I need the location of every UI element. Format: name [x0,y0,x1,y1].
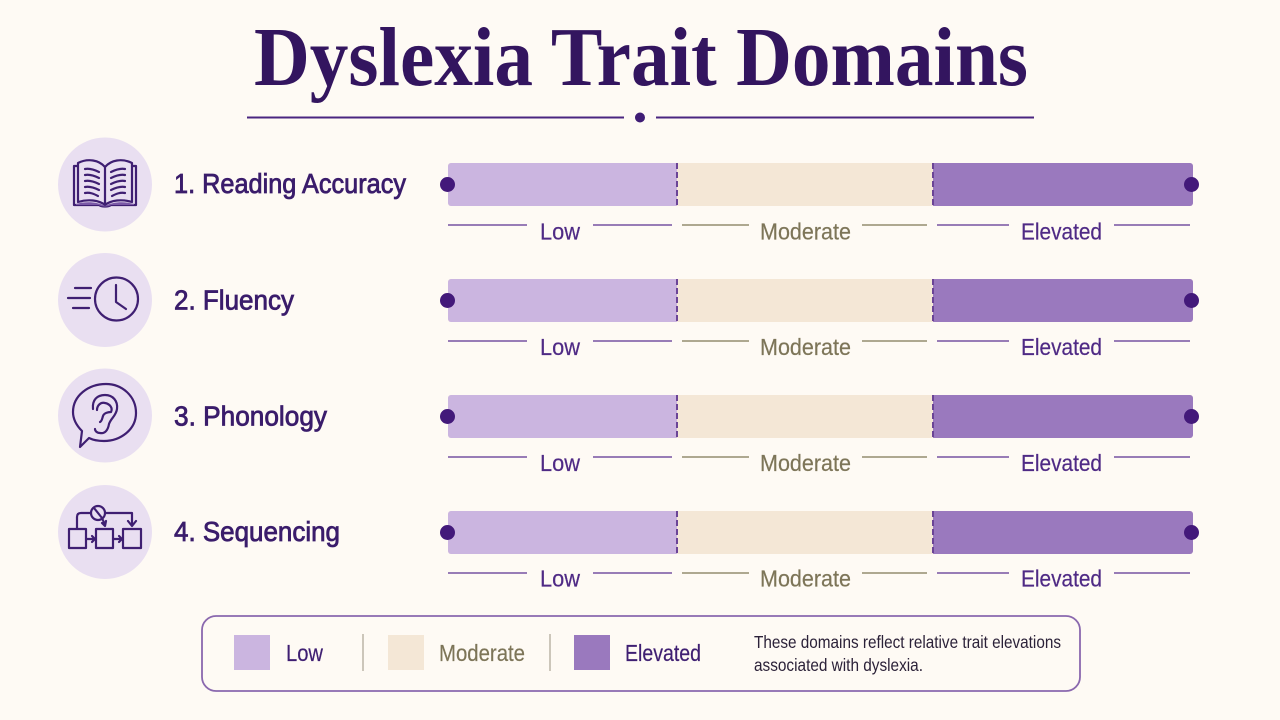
icon: sequence flow [58,485,152,579]
row 3: phonology [58,368,1199,476]
scale labels 2: Moderate [760,334,851,360]
row 4: sequencing [58,485,1199,592]
label: fluency: 2. Fluency [174,284,294,316]
scale labels 3: Elevated [1021,450,1102,476]
label: sequencing: 4. Sequencing [174,516,340,547]
scale labels 1: Elevated [1021,218,1102,244]
legend item: elevated: Elevated [625,640,701,666]
scale labels 4 [448,566,1190,592]
scale labels 2: Elevated [1021,334,1102,360]
scale labels 3: Low [540,450,581,476]
scale labels 1 [448,218,1190,244]
scale labels 4: Elevated [1021,566,1102,592]
scale labels 3: Moderate [760,450,851,476]
legend item: moderate [388,635,525,670]
icon: open book [58,138,152,232]
legend note [754,632,1061,675]
legend note: These domains reflect relative trait elevations [754,632,1061,652]
scale labels 2: Low [540,334,581,360]
scale bar 4 [440,511,1199,554]
scale bar 1 [440,163,1199,206]
title underline with dot [247,112,1034,122]
legend item: moderate: Moderate [439,640,525,666]
scale labels 4: Moderate [760,566,851,592]
title: Dyslexia Trait Domains [254,11,1028,104]
scale bar 3 [440,395,1199,438]
legend item: low: Low [286,640,324,666]
label: phonology: 3. Phonology [174,400,327,432]
scale labels 2 [448,334,1190,360]
row 1: reading accuracy [58,138,1199,244]
scale labels 4: Low [540,566,581,592]
scale labels 1: Moderate [760,218,851,244]
row 2: fluency [58,253,1199,360]
legend panel [202,616,1080,691]
scale bar 2 [440,279,1199,322]
legend item: low [234,635,324,670]
legend item: elevated [574,635,701,670]
scale labels 1: Low [540,218,581,244]
legend note: associated with dyslexia. [754,655,923,675]
scale labels 3 [448,450,1190,476]
icon: ear in speech bubble [58,368,152,462]
label: reading accuracy: 1. Reading Accuracy [174,168,406,199]
icon: clock with speed lines [58,253,152,347]
